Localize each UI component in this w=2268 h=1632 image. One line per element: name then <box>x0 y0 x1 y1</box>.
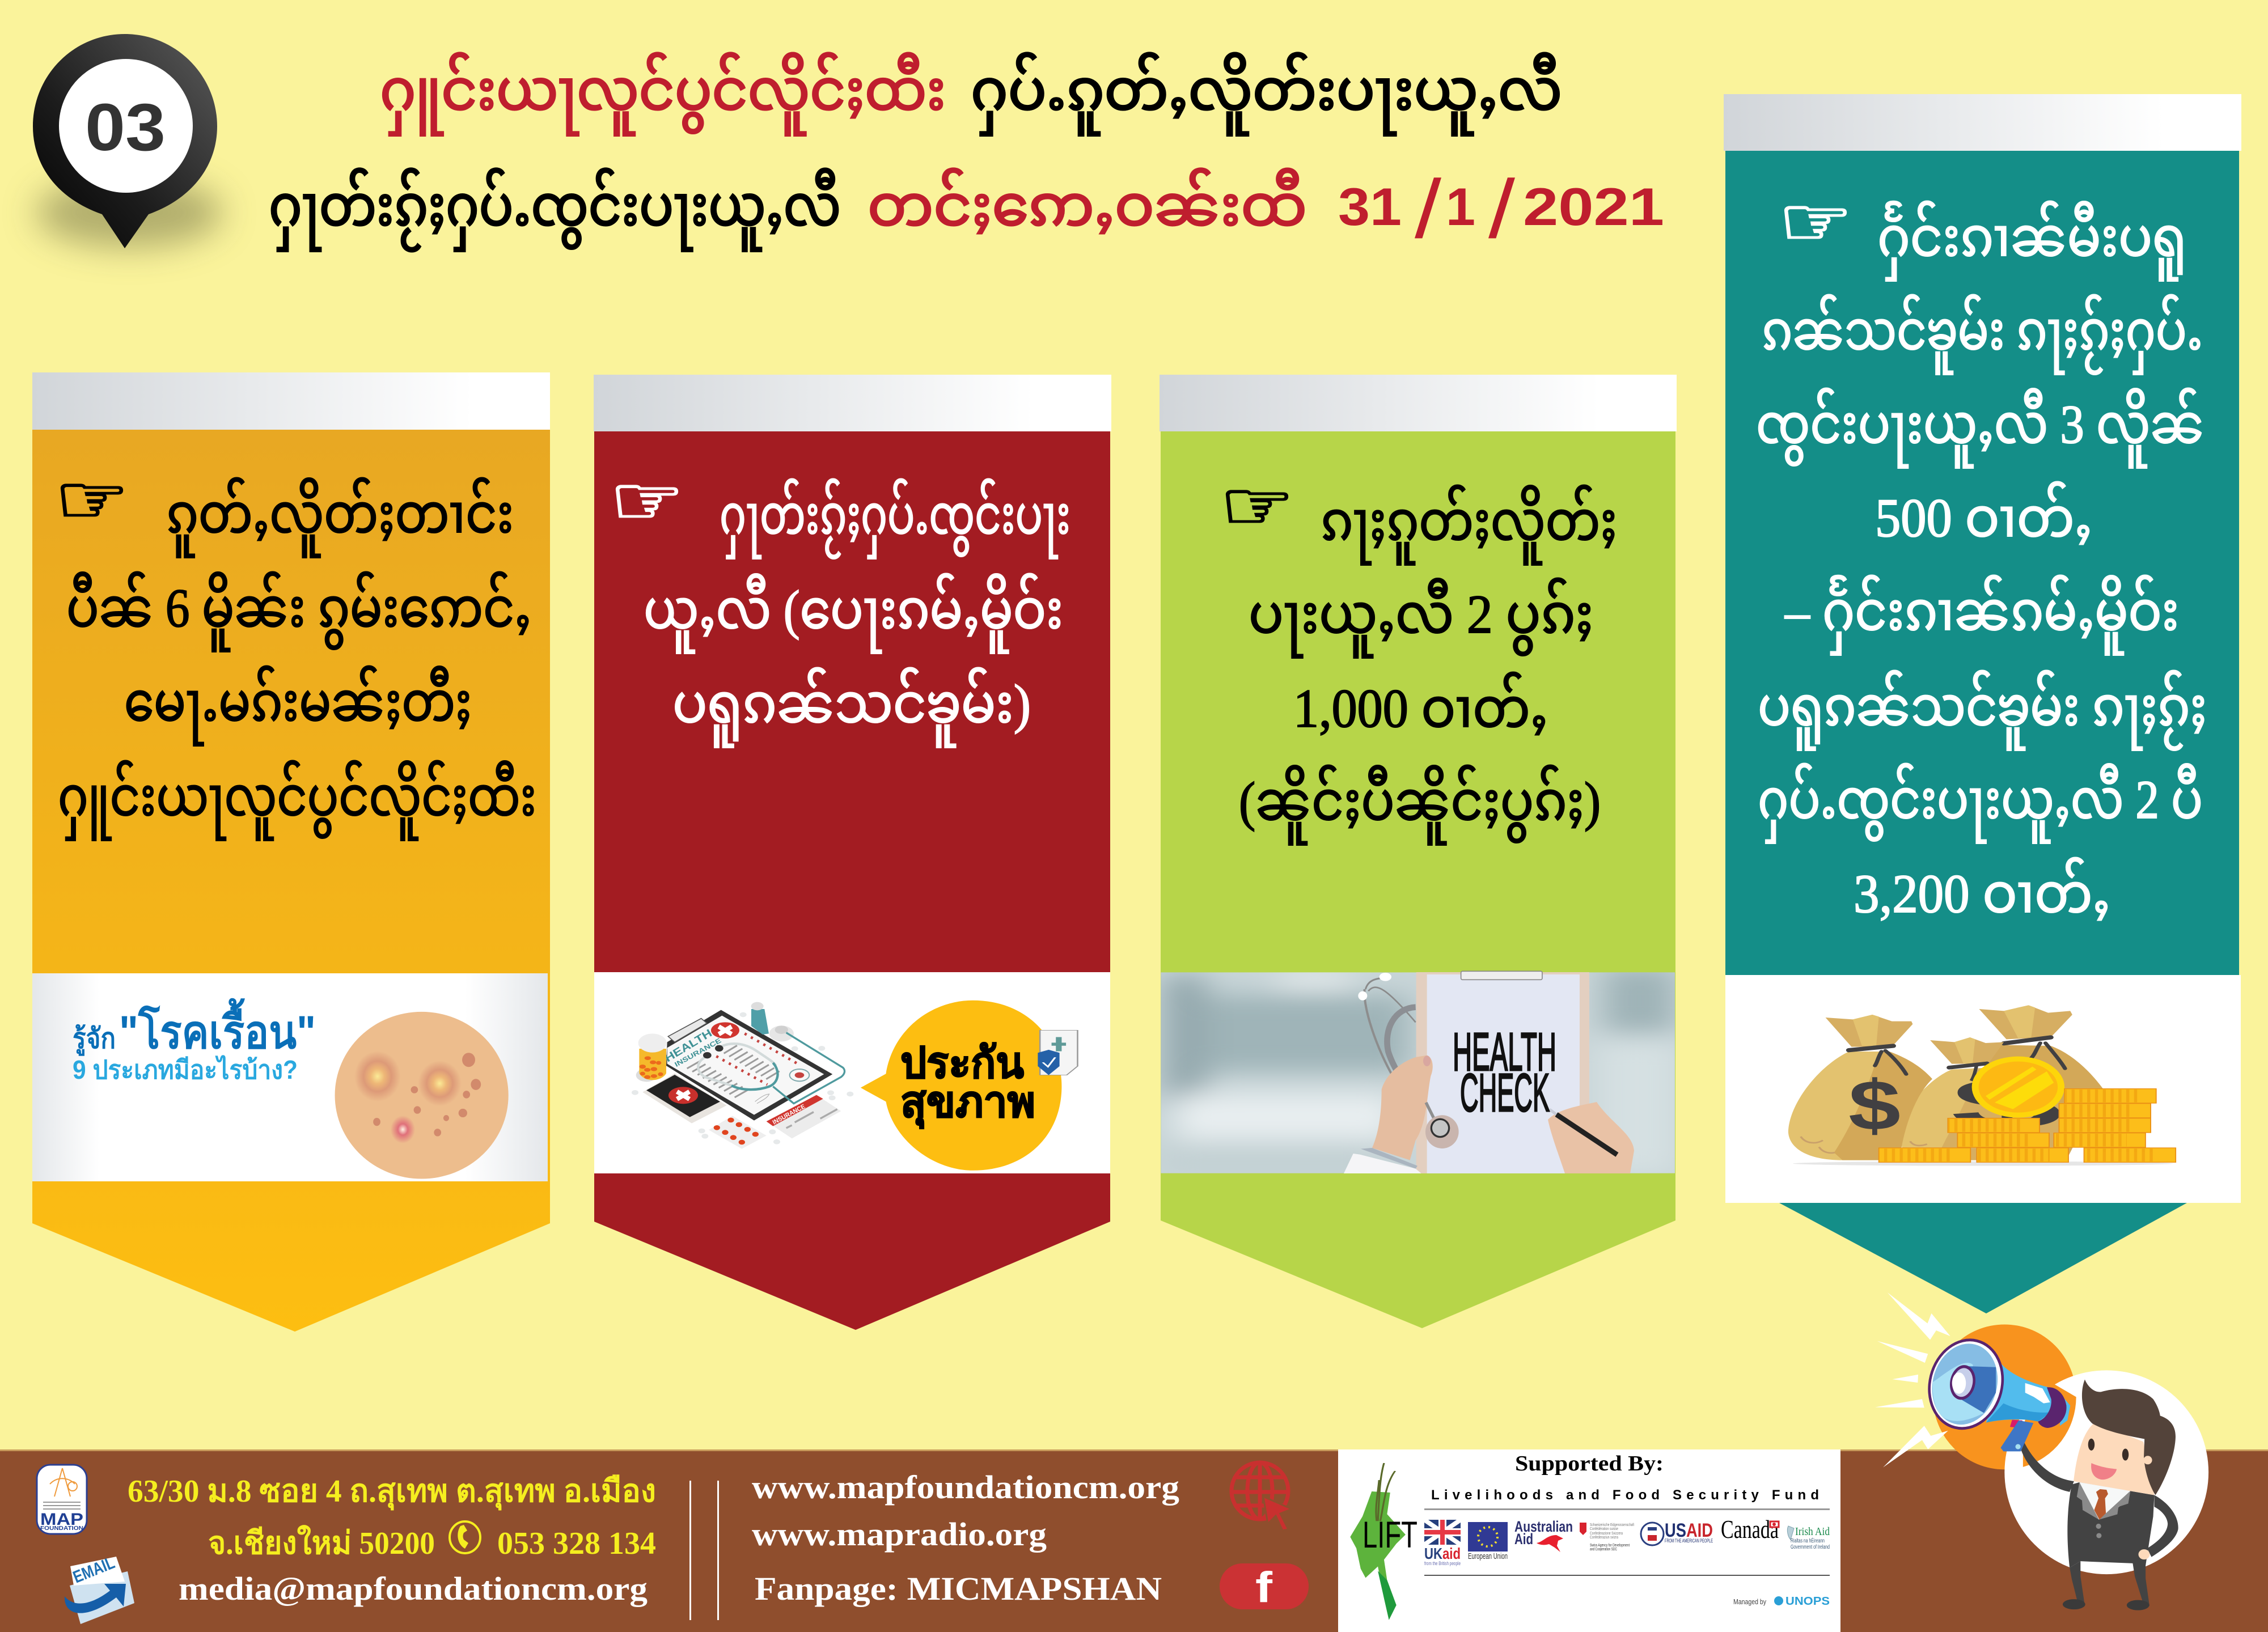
illustration: businessman with megaphone <box>1875 1292 2208 1610</box>
megaphone <box>1918 1330 2070 1451</box>
title: တင်ႈဢေႇဝၼ်းထီ <box>868 168 1307 238</box>
card 3 image: health check photo <box>1161 968 1677 1175</box>
card 4 text: ႁပ်ႉၸွင်းပႃးယူႇလီ 2 ပီ <box>1758 762 2203 843</box>
bag 2 <box>1899 1067 2061 1160</box>
card 2 image: health insurance <box>594 972 1110 1173</box>
footer web links: www.mapradio.org <box>752 1516 1047 1553</box>
logo: UK aid <box>1424 1520 1461 1566</box>
footer dividers <box>689 1481 719 1620</box>
card 2 image: health insurance: ประกัน <box>900 1039 1024 1087</box>
card 3 text: ပႃးယူႇလီ 2 ပွၵ်ႈ <box>1249 577 1593 658</box>
icon: globe with cursor <box>1232 1463 1292 1531</box>
title: / <box>1488 163 1515 255</box>
title: 31 <box>1338 177 1402 236</box>
panel: supporters <box>1338 1449 1840 1632</box>
card 4 banner shape <box>1725 151 2239 978</box>
logo: managed by UNOPS: Managed by <box>1733 1597 1766 1606</box>
card 2 text: ယူႇလီ (ပေႃးၵမ်ႇမိူဝ်း <box>644 573 1063 654</box>
card 1 text: ☞ <box>54 460 129 539</box>
logo: Swiss agency: and Cooperation SDC <box>1590 1548 1617 1552</box>
logo: Australian Aid: Australian <box>1514 1518 1573 1535</box>
isometric insurance illustration: INSURANCE <box>673 1036 722 1069</box>
footer email: media@mapfoundationcm.org <box>179 1570 648 1607</box>
icon: MAP foundation logo: FOUNDATION <box>40 1525 83 1532</box>
footer web links <box>752 1469 1179 1607</box>
card 1 text <box>54 460 536 841</box>
map pin badge 03: 03 <box>85 90 166 165</box>
title: 1 <box>1446 177 1475 236</box>
icon: facebook: f <box>1255 1563 1273 1612</box>
logo: USAID: FROM THE AMERICAN PEOPLE <box>1665 1538 1713 1544</box>
sound bolts <box>1875 1292 1950 1468</box>
logo: Irish Aid <box>1787 1525 1830 1550</box>
title: ႁႃတ်းၵႂ်ႈႁပ်ႉၸွင်းပႃးယူႇလီ <box>269 168 841 252</box>
logo: Swiss agency: Confederaziun svizra <box>1590 1536 1618 1540</box>
speech bubble with shield <box>861 1001 1077 1171</box>
logo: Irish Aid: Government of Ireland <box>1791 1544 1830 1550</box>
dollar signs: $ <box>1848 1066 1901 1145</box>
title: ႁူင်းယႃလူင်ပွင်လိူင်ႈထီး <box>380 52 946 136</box>
logo: USAID: USAID <box>1665 1520 1713 1541</box>
panel: card 4 teal <box>1724 94 2241 1313</box>
LIFT logo with map <box>1350 1463 1417 1620</box>
card 1 image: acne illustration <box>32 973 548 1181</box>
panel: card 1 amber <box>32 372 550 1332</box>
title: ႁပ်ႉၵူတ်ႇလိူတ်းပႃးယူႇလီ <box>971 52 1562 136</box>
white circle <box>2004 1370 2208 1574</box>
card 2 text: ႁႃတ်းၵႂ်ႈႁပ်ႉၸွင်းပႃး <box>720 478 1070 559</box>
card 2 text: ☞ <box>610 461 684 540</box>
card 4 text: ၸွင်းပႃးယူႇလီ 3 လိူၼ် <box>1756 387 2204 468</box>
bag 3 <box>1973 1045 2103 1160</box>
card 4 text: ႁႅင်းၵၢၼ်မီးပရူ <box>1877 200 2186 281</box>
fund name: Livelihoods and Food Security Fund <box>1431 1487 1819 1503</box>
footer web links: Fanpage: MICMAPSHAN <box>755 1570 1162 1607</box>
logo: Irish Aid: Rialtas na hÉireann <box>1791 1537 1825 1544</box>
supported by heading: Supported By: <box>1515 1452 1664 1476</box>
footer address in Thai <box>128 1474 656 1561</box>
footer bar <box>0 1449 2268 1632</box>
logo: managed by UNOPS <box>1733 1595 1830 1608</box>
isometric insurance illustration <box>632 1002 853 1149</box>
card 1 image: acne illustration: 9 ประเภทมีอะไรบ้าง? <box>73 1055 298 1084</box>
card 4 text: ပရူၵၼ်သင်ၶူမ်း ၵႃႈၵႂ်ႈ <box>1758 669 2207 751</box>
clipboard, hands and stethoscope <box>1344 971 1589 1173</box>
icon: facebook <box>1220 1563 1309 1612</box>
writing hand with pen <box>1548 1102 1634 1173</box>
logo: European Union: European Union <box>1468 1552 1508 1561</box>
logo: Swiss agency <box>1580 1523 1634 1552</box>
panel: card 2 red <box>594 375 1111 1330</box>
footer web links: www.mapfoundationcm.org <box>752 1469 1179 1506</box>
logo: UK aid: UKaid <box>1424 1545 1461 1562</box>
title <box>269 52 1664 255</box>
logo: managed by UNOPS: UNOPS <box>1785 1595 1830 1608</box>
card 4 image: money bags and coins: $ <box>1950 1065 2063 1143</box>
logo: Swiss agency: Confédération suisse <box>1590 1527 1618 1531</box>
card 1 banner shape <box>32 430 550 1332</box>
card 3 text: 1,000 ဝၢတ်ႇ <box>1293 671 1548 739</box>
icon: email envelope <box>65 1553 134 1624</box>
card 3 image: health check photo: HEALTH <box>1453 1022 1556 1082</box>
logo: Australian Aid <box>1514 1518 1573 1552</box>
logo: European Union <box>1468 1522 1508 1561</box>
icon: MAP foundation logo: MAP <box>40 1510 83 1529</box>
title: 2021 <box>1523 177 1664 236</box>
logo: Swiss agency: Schweizerische Eidgenossenschaft <box>1590 1523 1634 1527</box>
big coin <box>1972 1057 2064 1118</box>
LIFT logo with map: LIFT <box>1363 1514 1417 1555</box>
card 3 text: ၵႃႈၵူတ်ႈလိူတ်ႈ <box>1321 484 1617 565</box>
card 4 text: – ႁႅင်းၵၢၼ်ၵမ်ႇမိူဝ်း <box>1784 574 2179 655</box>
orange circle <box>1933 1324 2076 1469</box>
card 4 text: 500 ဝၢတ်ႇ <box>1875 481 2092 548</box>
icon: MAP foundation logo <box>37 1465 87 1534</box>
card 1 text: ၵူတ်ႇလိူတ်ႈတၢင်း <box>166 477 514 558</box>
panel: card 3 green <box>1160 375 1677 1328</box>
card 2 text: ပရူၵၼ်သင်ၶူမ်း) <box>672 667 1031 748</box>
card 4 text: 3,200 ဝၢတ်ႇ <box>1854 857 2110 924</box>
card 3 text: (ၼိူင်ႈပီၼိူင်ႈပွၵ်ႈ) <box>1239 764 1601 845</box>
phone icon <box>450 1521 480 1553</box>
footer address in Thai: 63/30 ม.8 ซอย 4 ถ.สุเทพ ต.สุเทพ อ.เมือง <box>128 1474 656 1511</box>
bag 1 <box>1788 1052 1932 1160</box>
logo: Swiss agency: Confederazione Svizzera <box>1590 1532 1623 1536</box>
card 3 banner shape <box>1161 431 1675 1328</box>
card 3 text <box>1220 467 1617 845</box>
card 3 image: health check photo: CHECK <box>1460 1063 1550 1123</box>
isometric insurance illustration: HEALTH <box>663 1027 714 1065</box>
icon: email envelope: EMAIL <box>70 1553 117 1587</box>
card 1 text: မေႃႉမၵ်းမၼ်ႈတီႈ <box>124 665 472 746</box>
logo: Irish Aid: Irish Aid <box>1795 1525 1830 1538</box>
logo: Swiss agency: Swiss Agency for Development <box>1590 1544 1630 1548</box>
card 4 image: money bags and coins <box>1725 975 2241 1203</box>
title: / <box>1415 163 1441 255</box>
card 1 text: ႁူင်းယႃလူင်ပွင်လိူင်ႈထီး <box>58 760 536 841</box>
logo: UK aid: from the British people <box>1424 1561 1461 1566</box>
card 4 text <box>1756 183 2207 924</box>
card 2 banner shape <box>594 431 1110 1330</box>
card 1 image: acne illustration: "โรคเรื้อน" <box>119 998 316 1058</box>
footer address in Thai: 053 328 134 <box>497 1526 656 1561</box>
man <box>2021 1380 2178 1610</box>
map pin badge 03 <box>33 34 223 248</box>
card 4 text: ☞ <box>1778 183 1853 261</box>
footer address in Thai: จ.เชียงใหม่ 50200 <box>208 1524 435 1561</box>
card 2 text <box>610 461 1070 748</box>
isometric insurance illustration: INSURANCE <box>772 1103 807 1126</box>
card 1 text: ပီၼ် 6 မိူၼ်း ၵွမ်းဢေင်ႇ <box>66 571 531 652</box>
logo: Australian Aid: Aid <box>1514 1531 1533 1548</box>
coin stacks <box>1879 1089 2176 1162</box>
logo: USAID <box>1641 1520 1713 1545</box>
card 3 text: ☞ <box>1220 467 1294 545</box>
logo: Canada: Canada <box>1721 1515 1779 1544</box>
card 1 image: acne illustration: รู้จัก <box>73 1023 116 1056</box>
card 2 image: health insurance: สุขภาพ <box>900 1078 1035 1129</box>
card 4 text: ၵၼ်သင်ၶူမ်း ၵႃႈၵႂ်ႈႁပ်ႉ <box>1762 294 2203 375</box>
